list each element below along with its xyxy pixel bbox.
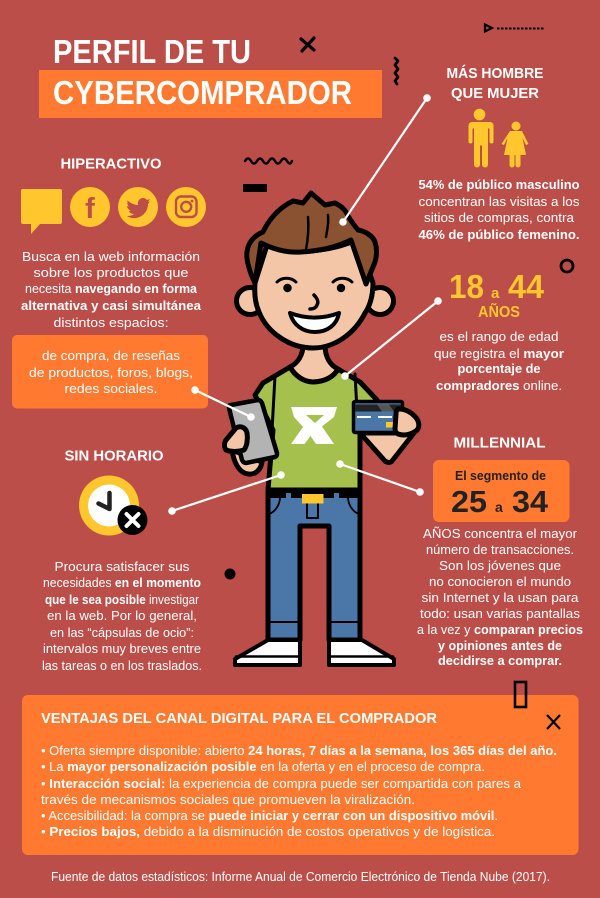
text: en el momento que le sea posible: que le sea posible investigar [45,592,200,607]
section: hiperactivo [12,156,208,408]
text: jóvenes transacciones: sin Internet y la usan para [422,590,579,605]
right arm and hand [360,433,414,462]
text: público masculino [418,177,580,242]
heading: sin horario: SIN HORARIO [64,448,164,464]
text: navegando en forma alternativa: necesita navegando en forma [25,281,198,296]
footer source: Fuente de datos estadísticos: Informe Anual de Comercio Electrónico de Tienda Nube (2017). [51,870,550,884]
text: rango de edad: porcentaje de [458,361,540,376]
text: navegando en forma alternativa: distintos espacios: [54,315,168,330]
icon: clock with cross [79,476,148,536]
stat: 18 a 44 años [449,268,545,321]
heading: millennial: MILLENNIAL [454,434,546,452]
text: jóvenes transacciones: decidirse a comprar. [438,653,562,668]
text: en el momento que le sea posible: en las “cápsulas de ocio”: [50,625,194,640]
panel list: través de mecanismos sociales que promueven la viralización. [41,793,415,807]
section: sin horario [42,448,202,673]
text: rango de edad: que registra el mayor [434,346,564,361]
section: edad [434,268,564,393]
callout: segmento 25 a 34: 34 [512,484,549,519]
text: público masculino: concentran las visitas a los [418,194,580,209]
panel list: • Interacción social: la experiencia de compra puede ser compartida con pares a [41,777,521,791]
heading: más hombre que mujer: QUE MUJER [451,85,539,102]
text: en el momento que le sea posible: en la web. Por lo general, [47,608,197,623]
text: jóvenes transacciones: AÑOS concentra el mayor [423,526,578,541]
icon: twitter [118,187,158,227]
text: público masculino: sitios de compras, contra [424,210,575,225]
text: en el momento que le sea posible: necesidades en el momento [43,575,201,590]
stat: 18 a 44 años: AÑOS [478,303,520,321]
shoes [235,640,394,665]
text: rango de edad: es el rango de edad [440,329,558,344]
jeans [268,492,360,640]
stat: 18 a 44 años: a [491,285,500,302]
text: navegando en forma alternativa [21,249,202,330]
title: PERFIL DE TU [53,33,251,70]
face [255,239,373,348]
callout: espacios: redes sociales. [64,381,158,396]
stat: 18 a 44 años: 18 [449,268,484,305]
panel list: • Precios bajos, debido a la disminución de costos operativos y de logística. [41,825,495,839]
panel list: • Oferta siempre disponible: abierto 24 horas, 7 días a la semana, los 365 días del año. [41,744,557,758]
title [39,33,382,118]
text: jóvenes transacciones: número de transacciones. [426,542,574,557]
text: en el momento que le sea posible [42,559,202,673]
text: en el momento que le sea posible: las tareas o en los traslados. [42,658,202,673]
left forearm [232,450,262,474]
pointer: shirt millennial [336,460,424,496]
icon: man and woman [468,109,528,168]
panel list: • La mayor personalización posible en la oferta y en el proceso de compra. [41,760,485,774]
ears [236,288,264,314]
shirt logo [291,407,337,444]
callout: espacios [12,335,208,408]
pointer: phone [191,386,255,421]
pointer: shirt schedule [168,471,285,515]
phone [229,400,277,463]
text: público masculino: 54% de público masculino [418,177,580,192]
panel list [41,744,557,839]
icon: facebook: f [85,193,95,225]
shirt [255,367,377,490]
text: jóvenes transacciones: Son los jóvenes que [439,558,561,573]
character illustration [224,193,419,665]
text: jóvenes transacciones: todo: usan varias pantallas [420,606,581,621]
smile [290,313,339,332]
neck [290,345,338,382]
callout: segmento 25 a 34: El segmento de [455,468,546,483]
text: navegando en forma alternativa: Busca en la web información [22,249,200,264]
callout: segmento 25 a 34 [433,460,570,522]
icon: facebook [70,187,110,227]
text: jóvenes transacciones: no conocieron el mundo [429,574,571,589]
callout: segmento 25 a 34: a [495,499,503,515]
text: navegando en forma alternativa: alternativa y casi simultánea [21,298,202,313]
heading: hiperactivo: HIPERACTIVO [60,156,162,172]
eyes and brows [277,278,352,309]
icon: instagram [166,187,206,227]
section: más hombre que mujer [418,65,580,242]
heading: más hombre que mujer: MÁS HOMBRE [446,65,544,82]
pointer: hair [339,94,431,226]
left hand [224,427,247,452]
callout: espacios: de compra, de reseñas [42,348,181,363]
text: público masculino: 46% de público femenino. [418,227,580,242]
text: jóvenes transacciones: a la vez y comparan precios [417,622,583,637]
text: rango de edad: compradores online. [436,378,562,393]
panel heading: VENTAJAS DEL CANAL DIGITAL PARA EL COMPRADOR [41,710,437,727]
callout: segmento 25 a 34: 25 [451,484,487,519]
pointer: shirt age [341,297,442,380]
text: jóvenes transacciones [417,526,583,668]
callout: espacios: de productos, foros, blogs, [29,365,193,380]
text: jóvenes transacciones: y opiniones antes de [438,638,562,653]
credit card [354,402,402,432]
text: rango de edad [434,329,564,393]
decorative marks [224,24,573,729]
icon: speech bubble [21,189,62,234]
panel list: • Accesibilidad: la compra se puede iniciar y cerrar con un dispositivo móvil . [41,809,498,823]
text: en el momento que le sea posible: Procura satisfacer sus [54,559,190,574]
stat: 18 a 44 años: 44 [508,268,545,305]
section: millennial [417,434,583,668]
text: en el momento que le sea posible: intervalos muy breves entre [43,641,201,656]
text: navegando en forma alternativa: sobre los productos que [34,265,188,280]
callout lines [168,94,442,515]
belt [268,489,360,504]
hair [247,193,376,284]
panel: ventajas del canal digital [22,695,578,855]
title: CYBERCOMPRADOR [53,74,352,111]
heading: más hombre que mujer [446,65,544,102]
